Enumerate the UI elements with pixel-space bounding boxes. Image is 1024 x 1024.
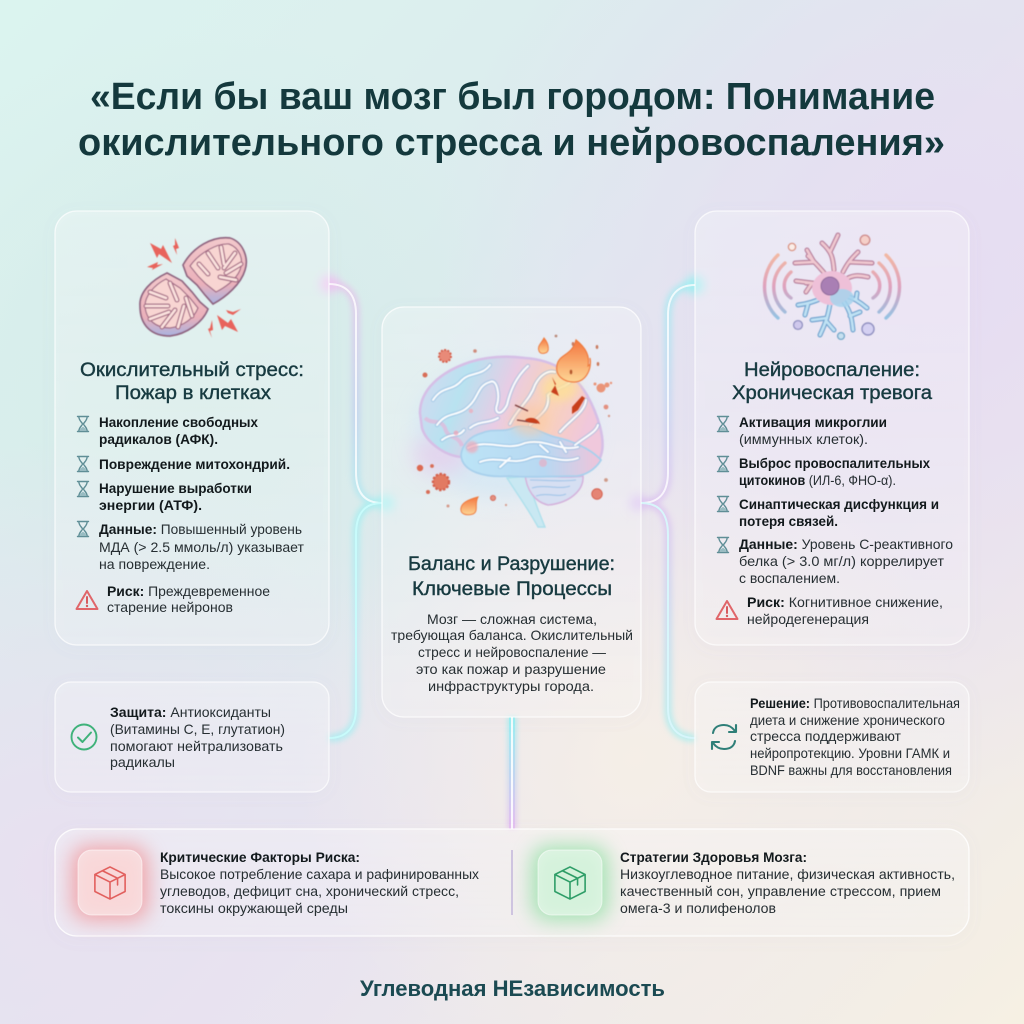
list item: mitochondria damage: Повреждение митохондрий. — [99, 456, 290, 472]
icon: red box — [72, 846, 148, 920]
list item: free radicals: Накопление свободных — [99, 414, 258, 430]
list item: energy — [78, 480, 252, 513]
list item: microglia: Активация микроглии — [739, 414, 887, 430]
icon: check — [72, 724, 96, 750]
heading: Баланс и Разрушение: — [408, 553, 615, 575]
strategies text: омега-3 и полифенолов — [620, 900, 776, 916]
risk factors text: углеводов, дефицит сна, хронический стресс, — [160, 883, 459, 899]
list item: cytokines: цитокинов (ИЛ-6, ФНО-α). — [739, 472, 896, 488]
body text: это как пожар и разрушение — [416, 661, 606, 677]
panel: oxidative stress — [55, 211, 329, 645]
panel: balance and destruction — [382, 307, 641, 717]
list item: data: Данные: Повышенный уровень — [99, 521, 302, 537]
icon: broken mitochondrion — [140, 238, 246, 338]
panel: solution — [695, 682, 969, 792]
heading: Хроническая тревога — [732, 382, 932, 404]
connector lines — [320, 275, 704, 829]
list item: microglia: (иммунных клеток). — [739, 431, 868, 447]
heading — [408, 553, 615, 600]
icon: brain with flames — [412, 335, 612, 527]
risk callout: старение нейронов — [107, 599, 233, 615]
list item: data — [718, 536, 953, 586]
strategies text: Низкоуглеводное питание, физическая активность, — [620, 866, 955, 882]
protection text: помогают нейтрализовать — [110, 738, 283, 754]
title — [78, 76, 945, 164]
list item: energy: энергии (АТФ). — [99, 497, 202, 513]
strategies text — [620, 849, 955, 916]
solution text: BDNF важны для восстановления — [750, 762, 952, 778]
solution text: Решение: Противовоспалительная — [750, 695, 960, 711]
heading: Ключевые Процессы — [412, 578, 612, 600]
solution text: стресса поддерживают — [750, 728, 902, 744]
strategies text: Стратегии Здоровья Мозга: — [620, 849, 807, 865]
footer: Углеводная НЕзависимость — [360, 976, 665, 1001]
risk callout — [76, 583, 270, 615]
list item: data: Данные: Уровень C-реактивного — [739, 536, 953, 552]
body text: Мозг — сложная система, — [427, 611, 597, 627]
icon: microglia — [764, 235, 900, 339]
icon: refresh arrows — [712, 725, 736, 749]
body text: стресс и нейровоспаление — — [418, 644, 606, 660]
risk factors text: токсины окружающей среды — [160, 900, 348, 916]
list item: data: с воспалением. — [739, 570, 840, 586]
heading: Пожар в клетках — [115, 382, 271, 404]
body text: инфраструктуры города. — [428, 678, 594, 694]
list item: cytokines: Выброс провоспалительных — [739, 455, 930, 471]
body text — [391, 611, 633, 694]
list item: synapses — [718, 496, 939, 529]
risk factors text: Критические Факторы Риска: — [160, 849, 360, 865]
list item: data: на повреждение. — [99, 556, 210, 572]
heading: Окислительный стресс: — [80, 359, 304, 381]
list item: microglia — [718, 414, 887, 447]
heading — [732, 359, 932, 404]
heading — [80, 359, 304, 404]
icon: green box — [532, 846, 608, 920]
list item: energy: Нарушение выработки — [99, 480, 252, 496]
risk factors text — [160, 849, 479, 916]
strategies text: качественный сон, управление стрессом, прием — [620, 883, 941, 899]
protection text: радикалы — [110, 754, 175, 770]
risk callout: нейродегенерация — [747, 611, 869, 627]
heading: Нейровоспаление: — [744, 359, 920, 381]
protection text: (Витамины C, E, глутатион) — [110, 721, 285, 737]
list item: cytokines — [718, 455, 930, 488]
risk factors text: Высокое потребление сахара и рафинированных — [160, 866, 479, 882]
solution text: нейропротекцию. Уровни ГАМК и — [750, 745, 950, 761]
risk callout: Риск: Преждевременное — [107, 583, 270, 599]
title: окислительного стресса и нейровоспаления» — [78, 122, 945, 164]
body text: требующая баланса. Окислительный — [391, 627, 633, 643]
list item: synapses: потеря связей. — [739, 513, 838, 529]
list item: free radicals: радикалов (АФК). — [99, 431, 218, 447]
list item: data: белка (> 3.0 мг/л) коррелирует — [739, 553, 945, 569]
risk callout: Риск: Когнитивное снижение, — [747, 594, 943, 610]
list item: data — [78, 521, 305, 572]
list item: free radicals — [78, 414, 258, 447]
list item: synapses: Синаптическая дисфункция и — [739, 496, 939, 512]
title: «Если бы ваш мозг был городом: Понимание — [90, 76, 935, 118]
panel: bottom factors — [55, 829, 969, 936]
protection text: Защита: Антиоксиданты — [110, 704, 271, 720]
protection text — [110, 704, 285, 770]
solution text: диета и снижение хронического — [750, 712, 945, 728]
list item: data: МДА (> 2.5 ммоль/л) указывает — [99, 539, 305, 555]
risk callout — [716, 594, 943, 627]
panel: protection — [55, 682, 329, 792]
solution text — [750, 695, 960, 778]
panel: neuroinflammation — [695, 211, 969, 645]
